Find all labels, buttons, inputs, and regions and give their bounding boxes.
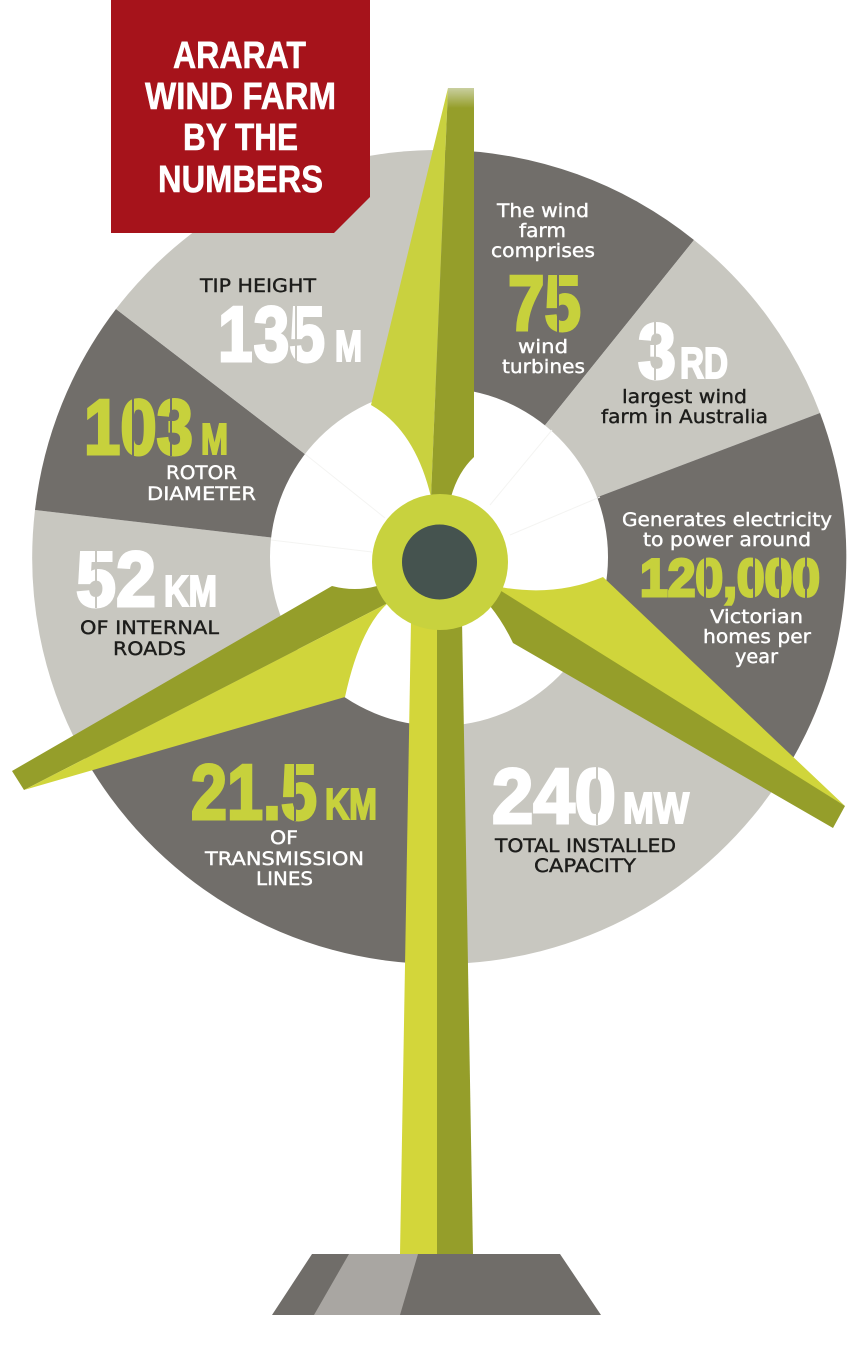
stat: rotor diameter: ROTOR bbox=[166, 462, 237, 484]
stat: homes powered: homes per bbox=[703, 626, 811, 648]
stat: turbine count: comprises bbox=[491, 240, 595, 262]
stat: installed capacity: CAPACITY bbox=[534, 855, 636, 877]
stat: national ranking: largest wind bbox=[622, 386, 747, 408]
stat: national ranking bbox=[601, 307, 768, 428]
hub bbox=[372, 494, 508, 630]
title banner: BY THE bbox=[183, 117, 298, 159]
stat: installed capacity: 240 bbox=[492, 752, 616, 840]
blade: top bbox=[371, 88, 474, 497]
title banner bbox=[111, 0, 370, 233]
stat: rotor diameter: 103 bbox=[84, 383, 193, 471]
tower bbox=[400, 620, 473, 1254]
stat: internal roads: KM bbox=[164, 567, 217, 616]
stat: internal roads: OF INTERNAL bbox=[80, 617, 219, 639]
stat: homes powered: year bbox=[735, 646, 778, 668]
base bbox=[272, 1254, 601, 1315]
stat: national ranking: 3 bbox=[638, 307, 676, 395]
title banner: ARARAT bbox=[173, 35, 306, 77]
stat: rotor diameter bbox=[84, 383, 256, 505]
stat: turbine count: 75 bbox=[508, 259, 581, 347]
stat: homes powered bbox=[622, 509, 832, 668]
stat: turbine count: The wind bbox=[496, 200, 589, 222]
stat: tip height: M bbox=[335, 322, 362, 371]
blade: left bbox=[12, 586, 388, 790]
stat: tip height: 135 bbox=[218, 290, 325, 378]
stat: turbine count: farm bbox=[519, 220, 566, 242]
title banner: NUMBERS bbox=[158, 159, 323, 201]
stat: homes powered: Generates electricity bbox=[622, 509, 832, 531]
stat: transmission lines: KM bbox=[325, 780, 377, 829]
stat: transmission lines bbox=[191, 748, 377, 890]
stat: tip height: TIP HEIGHT bbox=[199, 275, 316, 297]
stat: national ranking: farm in Australia bbox=[601, 406, 768, 428]
stat: turbine count: turbines bbox=[502, 356, 585, 378]
stat: homes powered: Victorian bbox=[710, 606, 803, 628]
stat: tip height bbox=[199, 275, 362, 378]
wheel of fact sectors bbox=[32, 150, 846, 964]
stat: internal roads: 52 bbox=[76, 535, 156, 623]
stat: homes powered: to power around bbox=[643, 529, 811, 551]
stat: homes powered: 120,000 bbox=[640, 549, 820, 608]
stat: installed capacity: TOTAL INSTALLED bbox=[494, 835, 676, 857]
stat: installed capacity bbox=[492, 752, 689, 877]
stat: rotor diameter: DIAMETER bbox=[147, 483, 256, 505]
stat: transmission lines: 21.5 bbox=[191, 748, 317, 836]
stat: transmission lines: OF bbox=[270, 827, 298, 849]
stat: internal roads bbox=[76, 535, 219, 660]
blade: right bbox=[490, 577, 845, 828]
stat: national ranking: RD bbox=[680, 339, 728, 388]
stat: rotor diameter: M bbox=[201, 415, 228, 464]
stat: transmission lines: LINES bbox=[256, 868, 313, 890]
stat: internal roads: ROADS bbox=[113, 638, 186, 660]
stat: installed capacity: MW bbox=[623, 784, 689, 833]
title banner: WIND FARM bbox=[145, 76, 336, 118]
stat: transmission lines: TRANSMISSION bbox=[204, 848, 364, 870]
stat: turbine count bbox=[491, 200, 595, 378]
stat: turbine count: wind bbox=[518, 336, 568, 358]
